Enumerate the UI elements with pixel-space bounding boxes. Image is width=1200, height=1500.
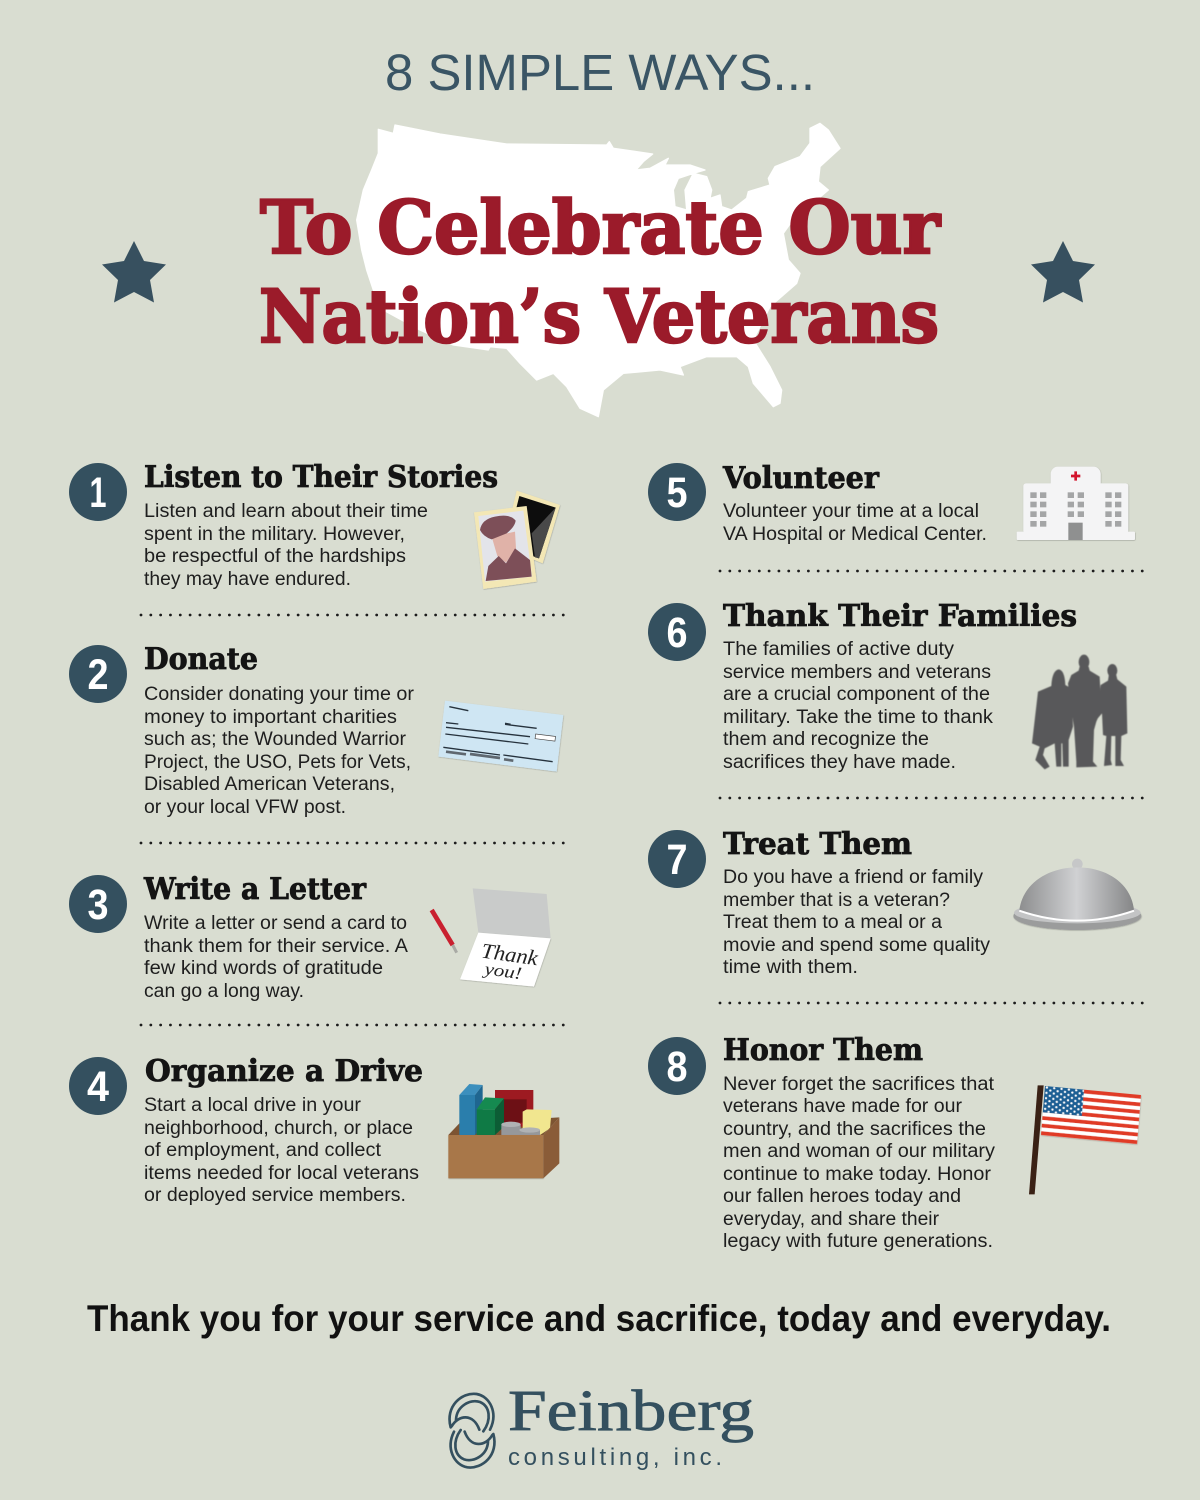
panel: 7 treat them <box>648 827 1141 978</box>
icon: thank you card and pen <box>432 888 551 987</box>
title: To Celebrate Our Nation's Veterans: Nation’s Veterans <box>259 274 939 360</box>
panel: 6 thank their families <box>648 599 1127 773</box>
number badge 6 <box>648 603 706 661</box>
number badge 2 <box>69 645 127 703</box>
heading 3: Write a Letter <box>143 872 367 907</box>
text block 2: such as; the Wounded Warrior <box>144 729 407 750</box>
panel: 2 donate <box>69 642 563 818</box>
icon: hospital <box>1017 467 1135 540</box>
number badge 1 <box>69 463 127 521</box>
text block 7: time with them. <box>723 957 858 978</box>
icon: swirl mark <box>450 1394 494 1468</box>
text block 8: country, and the sacrifices the <box>723 1119 986 1140</box>
text block 8: continue to make today. Honor <box>723 1164 992 1185</box>
text block 8: veterans have made for our <box>723 1096 963 1117</box>
heading 6: Thank Their Families <box>723 599 1077 634</box>
icon: american flag <box>1029 1085 1141 1194</box>
panel: 4 organize a drive <box>69 1054 559 1206</box>
heading 2: Donate <box>144 642 258 677</box>
text block 7: member that is a veteran? <box>723 890 950 911</box>
text block 8: men and woman of our military <box>723 1141 996 1162</box>
text block 1: Listen and learn about their time <box>144 501 428 522</box>
heading 8: Honor Them <box>723 1033 923 1068</box>
icon: thank you card and pen: Thank <box>480 939 540 970</box>
heading: 8 simple ways: 8 SIMPLE WAYS... <box>385 44 815 101</box>
panel: 1 listen to their stories <box>69 460 560 590</box>
panel: 5 volunteer <box>648 461 1135 545</box>
number badge 3 <box>69 875 127 933</box>
text block 2: or your local VFW post. <box>144 797 346 818</box>
text block 2: Project, the USO, Pets for Vets, <box>144 752 411 773</box>
icon: bank check <box>438 701 563 772</box>
number badge 5 <box>648 463 706 521</box>
icon: photographs <box>474 491 560 589</box>
text block 8: our fallen heroes today and <box>723 1186 961 1207</box>
text block 7: movie and spend some quality <box>723 935 991 956</box>
text block 4: or deployed service members. <box>144 1185 406 1206</box>
text block 6: service members and veterans <box>723 662 991 683</box>
heading 5: Volunteer <box>722 461 880 496</box>
text block 8: Never forget the sacrifices that <box>723 1074 995 1095</box>
number badge 4 <box>69 1057 127 1115</box>
text block 2: Consider donating your time or <box>144 684 415 705</box>
text block 2: Disabled American Veterans, <box>144 774 395 795</box>
number badge 4: 4 <box>87 1063 109 1111</box>
text block 4: of employment, and collect <box>144 1140 382 1161</box>
text block 6: military. Take the time to thank <box>723 707 994 728</box>
text block 1: be respectful of the hardships <box>144 546 406 567</box>
number badge 5: 5 <box>666 469 688 517</box>
number badge 8 <box>648 1037 706 1095</box>
logo wordmark: Feinberg <box>508 1378 754 1443</box>
text block 4 <box>144 1095 419 1206</box>
text block 8 <box>723 1074 996 1252</box>
number badge 2: 2 <box>88 651 108 699</box>
text block 5: Volunteer your time at a local <box>723 501 979 522</box>
text block 2 <box>144 684 415 818</box>
text block 2: money to important charities <box>144 707 397 728</box>
text block 8: legacy with future generations. <box>723 1231 993 1252</box>
text block 3: Write a letter or send a card to <box>144 913 407 934</box>
text block 5 <box>723 501 987 545</box>
heading 4: Organize a Drive <box>145 1054 423 1089</box>
number badge 8: 8 <box>666 1043 688 1091</box>
logo: Feinberg Consulting <box>450 1378 754 1471</box>
panel: 3 write a letter <box>69 872 551 1002</box>
icon: thank you card and pen: you! <box>481 959 523 983</box>
text block 3: few kind words of gratitude <box>144 958 383 979</box>
map: United States silhouette <box>357 123 840 417</box>
text block 6 <box>723 639 994 773</box>
text block 1: they may have endured. <box>144 569 351 590</box>
text block 3: thank them for their service. A <box>144 936 408 957</box>
number badge 3: 3 <box>88 881 108 929</box>
panel: 8 honor them <box>648 1033 1141 1252</box>
text block 7: Do you have a friend or family <box>723 867 984 888</box>
text block 8: everyday, and share their <box>723 1209 940 1230</box>
text block 1 <box>144 501 428 590</box>
text block 6: are a crucial component of the <box>723 684 990 705</box>
text block 5: VA Hospital or Medical Center. <box>723 524 987 545</box>
icon: family silhouette <box>1032 655 1127 769</box>
icon: left star <box>102 241 166 302</box>
number badge 6: 6 <box>666 609 688 657</box>
number badge 1: 1 <box>90 469 106 517</box>
text block 6: sacrifices they have made. <box>723 752 956 773</box>
logo subline: consulting, inc. <box>508 1444 722 1471</box>
text block 7 <box>723 867 991 978</box>
text block 4: neighborhood, church, or place <box>144 1118 413 1139</box>
text block 4: items needed for local veterans <box>144 1163 419 1184</box>
text block 1: spent in the military. However, <box>144 524 405 545</box>
title: To Celebrate Our Nation's Veterans <box>259 185 942 360</box>
text block 6: The families of active duty <box>723 639 955 660</box>
icon: donation box <box>448 1084 559 1178</box>
text block 4: Start a local drive in your <box>144 1095 362 1116</box>
icon: serving cloche <box>1013 859 1141 930</box>
closing message: Thank you for your service and sacrifice, today and everyday. <box>87 1298 1111 1339</box>
text block 3: can go a long way. <box>144 981 304 1002</box>
icon: right star <box>1031 241 1095 302</box>
text block 7: Treat them to a meal or a <box>723 912 942 933</box>
heading 1: Listen to Their Stories <box>144 460 498 495</box>
number badge 7 <box>648 830 706 888</box>
text block 3 <box>144 913 408 1002</box>
number badge 7: 7 <box>666 836 688 884</box>
text block 6: them and recognize the <box>723 729 929 750</box>
heading 7: Treat Them <box>723 827 912 862</box>
title: To Celebrate Our Nation's Veterans: To Celebrate Our <box>260 185 942 271</box>
